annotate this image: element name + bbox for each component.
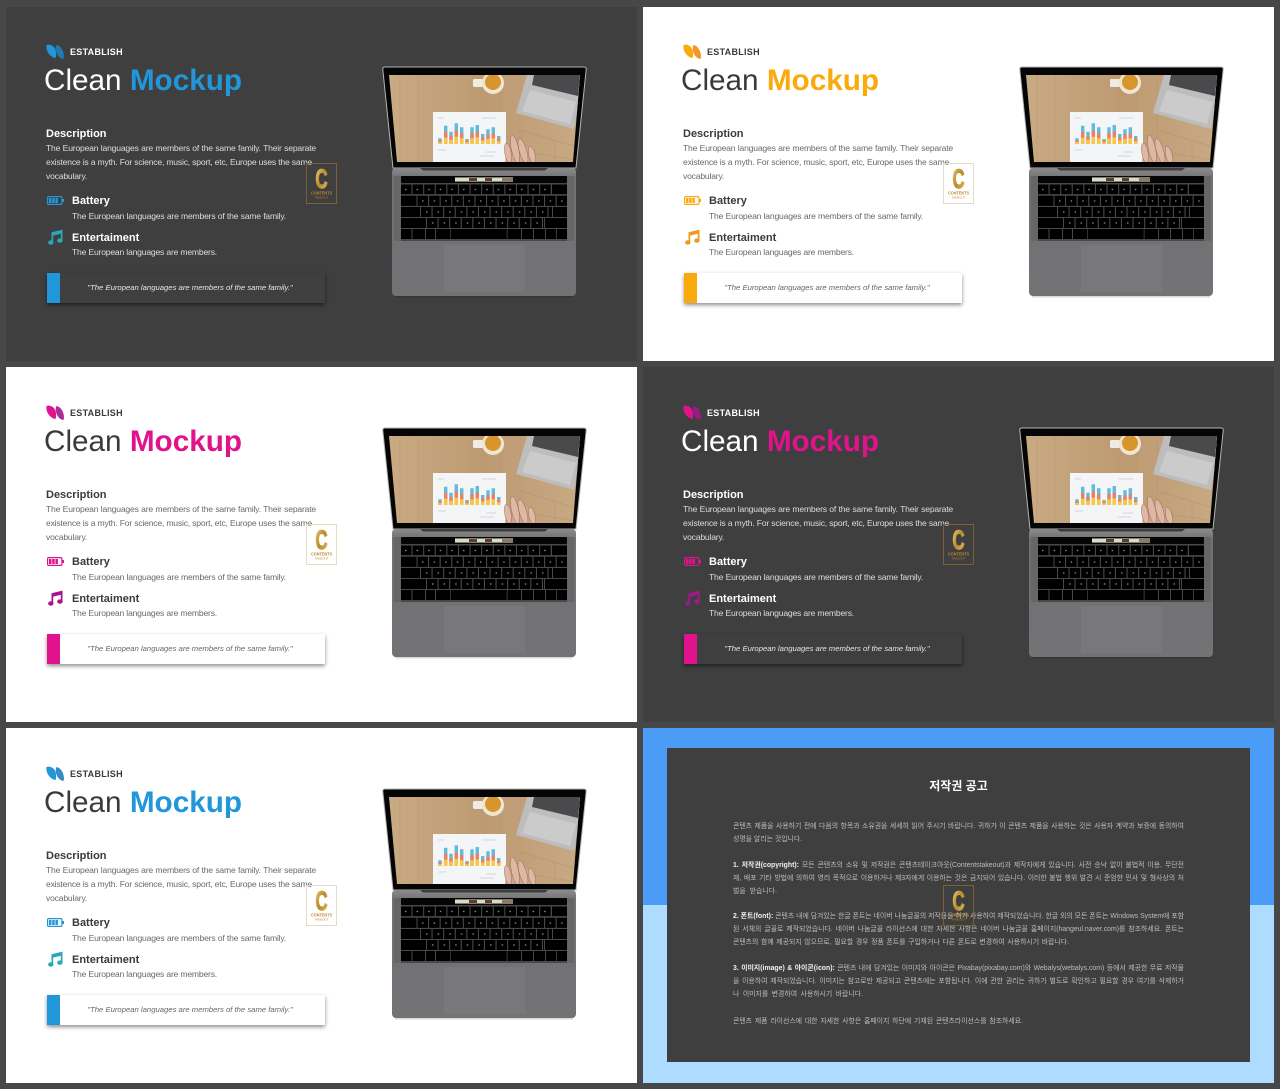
heading: entertainment: Entertaiment xyxy=(72,954,139,966)
icon: music xyxy=(685,230,700,245)
watermark badge xyxy=(943,885,974,926)
watermark badge xyxy=(306,163,337,204)
callout: quote: "The European languages are members of the same family." xyxy=(87,1005,293,1014)
callout: quote: "The European languages are members of the same family." xyxy=(724,644,930,653)
text: description xyxy=(46,504,316,542)
text: battery: The European languages are members of the same family. xyxy=(709,572,923,582)
icon: music xyxy=(48,590,63,606)
heading: battery: Battery xyxy=(709,556,747,568)
text: copyright notice body: 콘텐츠의 함께 제공되지 않으므로, 필요할 경우 정품 폰트를 구입하거나 다른 폰트로 변경하여 사용하시기 바랍니다. xyxy=(733,939,1069,946)
text: entertainment: The European languages are members. xyxy=(72,969,217,979)
text: copyright notice body: 된 서체의 글꼴로 제작되었습니다. 네이버 나눔글꼴 라이선스에 대한 자세한 사항은 네이버 나눔글꼴 홈페이지(hangeul.naver.com)를 참조하세요. 폰트는 xyxy=(733,926,1184,933)
text: copyright notice body: 재, 배포 기타 방법에 의하여 영리 목적으로 이용하거나 제3자에게 이용하는 것은 금지되어 있습니다. 이러한 불법 행위 발견 시 준엄한 민사 및 형사상의 처 xyxy=(733,875,1184,882)
watermark badge xyxy=(943,524,974,565)
text: copyright notice body: 콘텐츠 제품을 사용하기 전에 다음의 항목과 소유권을 세세히 읽어 주시기 바랍니다. 귀하가 이 콘텐츠 제품을 사용하는 것은 사용자 계약과 보증에 동의하여 xyxy=(733,823,1184,830)
laptop mockup xyxy=(1019,428,1224,658)
laptop mockup xyxy=(382,428,587,658)
watermark badge xyxy=(306,524,337,565)
text: description xyxy=(46,143,316,181)
heading: battery: Battery xyxy=(72,195,110,207)
heading: battery: Battery xyxy=(709,195,747,207)
icon: music xyxy=(48,230,63,245)
brand name: ESTABLISH xyxy=(70,47,123,57)
callout: quote xyxy=(684,634,962,664)
callout: quote: "The European languages are members of the same family." xyxy=(87,644,293,653)
text: description: The European languages are members of the same family. Their separate xyxy=(683,504,953,514)
icon: music xyxy=(685,590,700,606)
text: description: The European languages are members of the same family. Their separate xyxy=(46,865,316,875)
heading: entertainment: Entertaiment xyxy=(709,232,776,244)
heading: description: Description xyxy=(683,489,744,501)
icon: battery xyxy=(47,918,64,927)
text: entertainment: The European languages are members. xyxy=(72,247,217,257)
heading: entertainment: Entertaiment xyxy=(72,232,139,244)
icon: battery xyxy=(684,557,701,566)
text: entertainment: The European languages are members. xyxy=(72,608,217,618)
text: copyright notice body: 나 이미지를 변경하여 사용하시기 바랍니다. xyxy=(733,991,863,998)
brand name: ESTABLISH xyxy=(70,769,123,779)
heading: description: Description xyxy=(46,128,107,140)
icon: brand leaves xyxy=(46,766,64,781)
text: entertainment: The European languages are members. xyxy=(709,608,854,618)
laptop mockup xyxy=(1019,66,1224,298)
text: description xyxy=(46,865,316,903)
icon: brand leaves xyxy=(683,44,701,59)
panel: slide 5 light blue xyxy=(6,729,637,1083)
text: entertainment: The European languages are members. xyxy=(709,247,854,257)
heading: description: Description xyxy=(46,489,107,501)
text: copyright notice body: 3. 이미지(image) & 아이콘(icon): 콘텐츠 내에 담겨있는 이미지와 아이콘은 Pixabay(pixabay.com)와 Webalys(webalys.com) 등에서 제공한 무료 저작물 xyxy=(733,965,1184,972)
panel: notice background xyxy=(667,748,1250,1062)
icon: battery xyxy=(47,196,64,205)
text: description: The European languages are members of the same family. Their separate xyxy=(683,143,953,153)
text: copyright notice body: 벌을 받습니다. xyxy=(733,888,777,895)
callout: quote xyxy=(47,995,325,1025)
heading: entertainment: Entertaiment xyxy=(72,593,139,605)
brand name: ESTABLISH xyxy=(70,408,123,418)
text: battery: The European languages are members of the same family. xyxy=(72,572,286,582)
title: Clean Mockup xyxy=(44,425,242,458)
text: description xyxy=(683,504,953,542)
text: copyright notice body xyxy=(733,822,1184,1025)
laptop mockup xyxy=(382,788,587,1020)
text: description: vocabulary. xyxy=(46,532,87,542)
text: copyright notice body: 1. 저작권(copyright): 모든 콘텐츠의 소유 및 저작권은 콘텐츠테이크아웃(Contentstakeout)과 제작자에게 있습니다. 사전 승낙 없이 불법적 이용, 무단전 xyxy=(733,862,1184,869)
heading: battery: Battery xyxy=(72,556,110,568)
panel: slide 3 light pink xyxy=(6,368,637,722)
heading: battery: Battery xyxy=(72,917,110,929)
title: Clean Mockup xyxy=(681,425,879,458)
text: description: vocabulary. xyxy=(46,171,87,181)
panel: slide 4 dark pink xyxy=(643,368,1274,722)
text: description: The European languages are members of the same family. Their separate xyxy=(46,143,316,153)
panel: copyright notice slide xyxy=(643,728,1274,1083)
callout: quote xyxy=(47,273,325,303)
text: description: vocabulary. xyxy=(683,171,724,181)
text: description: existence is a myth. For science, music, sport, etc, Europe uses the same xyxy=(46,879,312,889)
icon: brand leaves xyxy=(46,406,64,420)
text: copyright notice body: 성명을 알리는 것입니다. xyxy=(733,836,802,843)
title: Clean Mockup xyxy=(44,786,242,819)
icon: battery xyxy=(47,557,64,566)
text: description: The European languages are members of the same family. Their separate xyxy=(46,504,316,514)
callout: quote: "The European languages are members of the same family." xyxy=(724,283,930,292)
text: copyright notice body: 을 이용하여 제작되었습니다. 이미지는 참고로만 제공되고 콘텐츠에는 포함됩니다. 이에 관한 권리는 귀하가 별도로 확인하고 필요할 경우 여기를 삭제하거 xyxy=(733,978,1184,985)
panel: slide 2 light orange xyxy=(643,7,1274,361)
text: description: vocabulary. xyxy=(46,893,87,903)
heading: entertainment: Entertaiment xyxy=(709,593,776,605)
brand name: ESTABLISH xyxy=(707,408,760,418)
title: Clean Mockup xyxy=(44,64,242,97)
text: copyright notice body: 콘텐츠 제품 라이선스에 대한 자세한 사항은 홈페이지 하단에 기재된 콘텐츠라이선스를 참조하세요. xyxy=(733,1018,1023,1025)
text: description: existence is a myth. For science, music, sport, etc, Europe uses the same xyxy=(46,157,312,167)
watermark badge xyxy=(943,163,974,204)
heading: description: Description xyxy=(683,128,744,140)
heading: copyright notice: 저작권 공고 xyxy=(929,779,988,793)
icon: battery xyxy=(684,196,701,205)
text: copyright notice body: 2. 폰트(font): 콘텐츠 내에 담겨있는 한글 폰트는 네이버 나눔글꼴의 저작물을 허가 사용하여 제작되었습니다. 한글 외의 모든 폰트는 Windows System에 포함 xyxy=(733,913,1184,920)
text: description: existence is a myth. For science, music, sport, etc, Europe uses the same xyxy=(46,518,312,528)
text: description: existence is a myth. For science, music, sport, etc, Europe uses the same xyxy=(683,157,949,167)
text: battery: The European languages are members of the same family. xyxy=(709,211,923,221)
title: Clean Mockup xyxy=(681,64,879,97)
text: description xyxy=(683,143,953,181)
callout: quote xyxy=(47,634,325,664)
text: battery: The European languages are members of the same family. xyxy=(72,211,286,221)
text: battery: The European languages are members of the same family. xyxy=(72,933,286,943)
panel: slide 1 dark blue xyxy=(6,7,637,361)
callout: quote xyxy=(684,273,962,303)
callout: quote: "The European languages are members of the same family." xyxy=(87,283,293,292)
watermark badge xyxy=(306,885,337,926)
heading: description: Description xyxy=(46,850,107,862)
text: description: existence is a myth. For science, music, sport, etc, Europe uses the same xyxy=(683,518,949,528)
icon: music xyxy=(48,952,63,967)
brand name: ESTABLISH xyxy=(707,47,760,57)
icon: brand leaves xyxy=(46,44,64,59)
icon: brand leaves xyxy=(683,406,701,420)
laptop mockup xyxy=(382,66,587,298)
text: description: vocabulary. xyxy=(683,532,724,542)
